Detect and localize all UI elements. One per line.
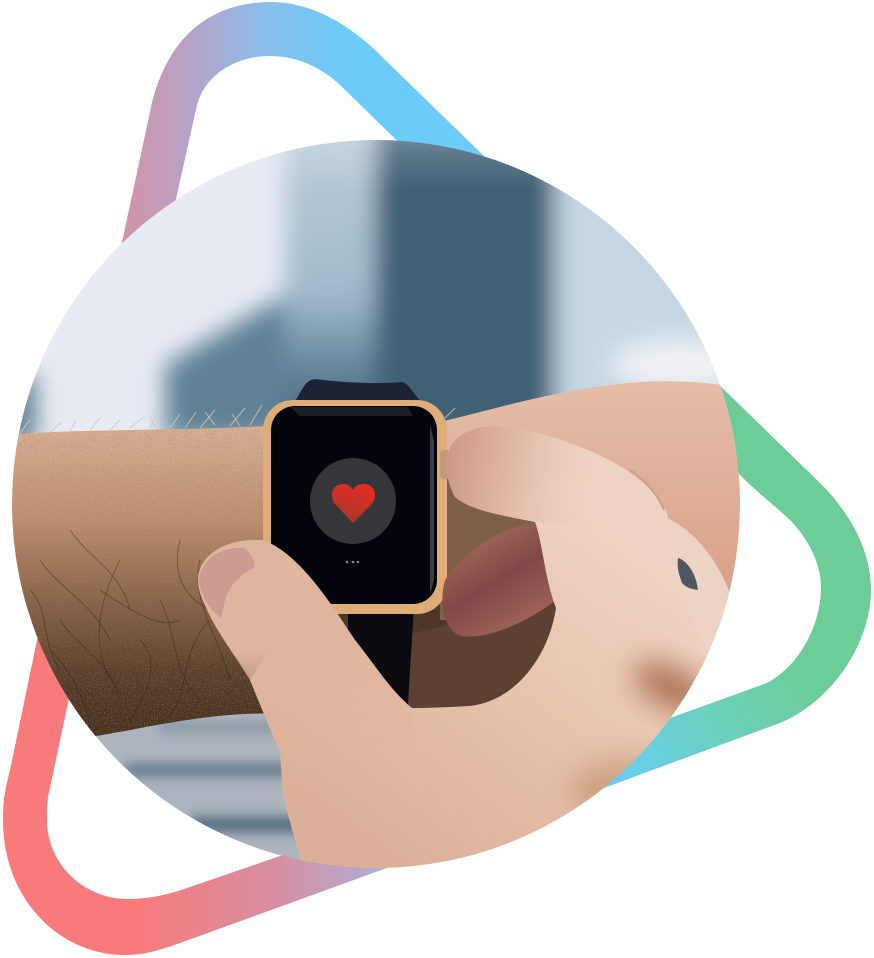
rounded triangle: right green and blue gradient	[603, 386, 871, 788]
wrist hair	[20, 405, 455, 434]
rounded triangle: top and left gradient	[122, 2, 484, 244]
middle finger	[442, 523, 556, 637]
knuckle shadow	[626, 651, 718, 725]
watch band top	[296, 379, 420, 400]
skin shading near the palm	[562, 747, 645, 811]
right forearm	[446, 381, 740, 674]
tattoo	[678, 558, 698, 590]
finger crease	[630, 470, 664, 510]
dark skin under the hand	[408, 602, 556, 708]
thumb	[198, 540, 412, 724]
screen edge highlight	[430, 425, 434, 595]
dark skin beside the watch	[440, 478, 536, 620]
thumbnail	[199, 548, 255, 618]
blurred sky and buildings	[16, 140, 736, 453]
index fingertip shading	[446, 426, 566, 522]
screen glare	[290, 407, 413, 416]
little finger	[668, 518, 729, 678]
watch crown	[440, 450, 448, 479]
left forearm	[12, 426, 264, 736]
page dots	[346, 561, 359, 563]
watch screen	[271, 406, 437, 604]
watch case	[263, 400, 447, 614]
hand and index finger	[250, 426, 725, 871]
watch band bottom	[348, 614, 414, 704]
blurred building below arm	[69, 700, 301, 860]
circular photo: wrist with smartwatch	[0, 120, 770, 880]
heart rate circle	[310, 458, 396, 544]
rounded triangle: bottom red gradient	[3, 638, 388, 955]
forearm hairs	[30, 530, 230, 720]
icon: heart	[332, 484, 375, 523]
dark fill behind the watch	[338, 603, 448, 634]
